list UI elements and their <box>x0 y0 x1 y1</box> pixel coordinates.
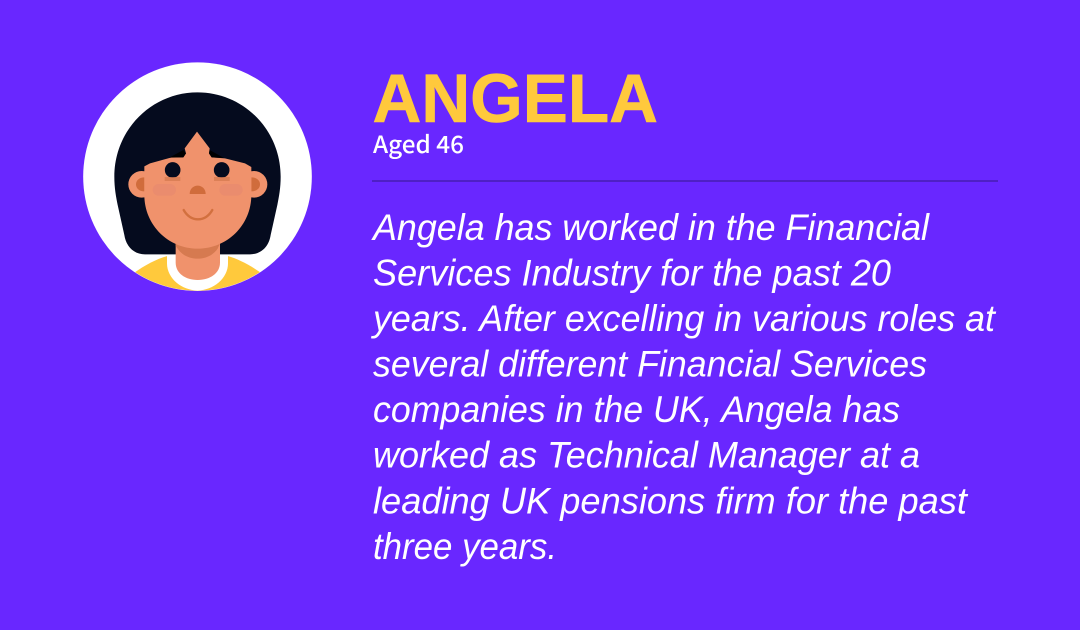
yellow shirt <box>135 256 260 291</box>
hair <box>114 92 281 254</box>
ear right <box>251 171 268 198</box>
biography text block: years. After excelling in various roles at <box>370 298 997 339</box>
biography text block <box>370 207 997 567</box>
eye right <box>214 162 229 178</box>
ear left inner <box>136 177 144 191</box>
biography text block: companies in the UK, Angela has <box>373 389 900 430</box>
ear left <box>128 171 144 198</box>
smile <box>184 210 212 219</box>
neck <box>176 240 220 280</box>
under-eye right <box>214 177 230 181</box>
divider <box>372 180 998 182</box>
biography text block: three years. <box>373 526 557 567</box>
biography text block: Services Industry for the past 20 <box>373 252 891 294</box>
ear right inner <box>251 177 260 191</box>
hair fringe tips <box>169 150 224 158</box>
cheek left <box>153 184 176 196</box>
nose <box>190 186 206 194</box>
biography text block: leading UK pensions firm for the past <box>373 480 969 521</box>
biography text block: Angela has worked in the Financial <box>371 207 931 248</box>
biography text block: several different Financial Services <box>373 344 927 384</box>
neck shadow <box>176 243 220 259</box>
under-eye left <box>165 177 180 181</box>
heading: name: ANGELA <box>372 60 658 137</box>
subheading: age: Aged 46 <box>373 125 464 160</box>
face <box>144 132 251 249</box>
biography text block: worked as Technical Manager at a <box>373 434 920 476</box>
eye left <box>165 162 180 178</box>
shirt collar <box>167 256 228 290</box>
icon: Angela avatar portrait <box>83 62 312 295</box>
infographic canvas <box>83 62 998 566</box>
cheek right <box>219 184 243 196</box>
